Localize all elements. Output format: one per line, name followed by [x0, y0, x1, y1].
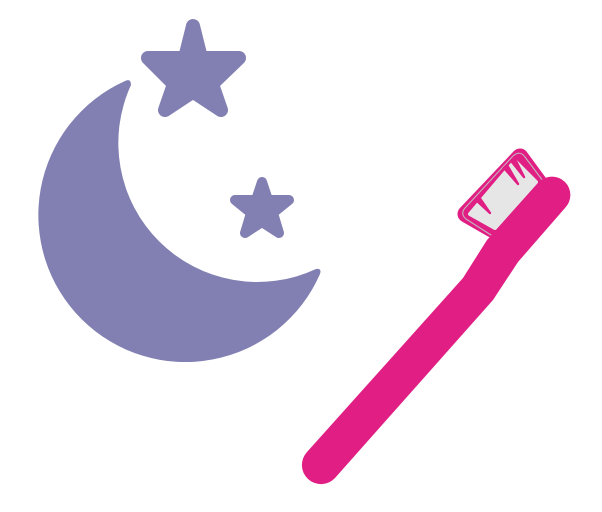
- icon: crescent moon: [38, 80, 320, 362]
- icon: toothbrush: [302, 153, 570, 484]
- icon: large star: [148, 26, 239, 110]
- toothbrush handle: [302, 177, 570, 484]
- toothbrush head base: [466, 157, 542, 229]
- toothbrush bristles: [470, 161, 536, 228]
- bristle mark: middle: [504, 165, 518, 184]
- bristle mark: left: [476, 197, 490, 213]
- icon: small star: [235, 182, 289, 233]
- toothbrush head outline: [463, 153, 543, 235]
- bristle mark: right: [512, 159, 524, 177]
